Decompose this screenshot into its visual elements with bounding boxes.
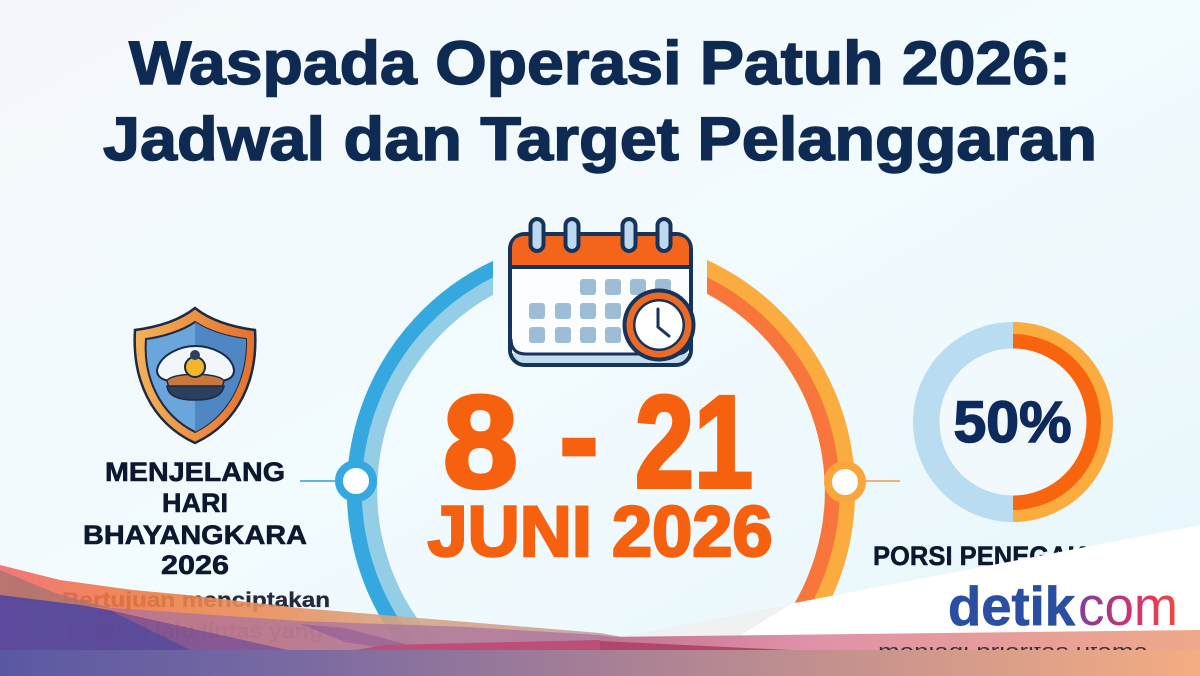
white corner wedge [623,525,1200,640]
title [103,29,1097,173]
donut chart 50% [913,322,1113,522]
detikcom logo: com [1078,575,1178,637]
icon: police shield [135,308,255,443]
left description: Bertujuan menciptakan [62,588,330,612]
left description [62,588,330,643]
date range: 8 [443,368,518,515]
left label: Menjelang Hari Bhayangkara 2026 [83,457,307,580]
blue arc [347,260,493,625]
icon: calendar with clock [510,217,696,365]
left label: Menjelang Hari Bhayangkara 2026: 2026 [161,550,229,580]
date range: - [559,362,599,509]
title: Jadwal dan Target Pelanggaran [103,105,1097,173]
left description: kondisi lalu lintas yang [67,619,323,643]
detikcom logo: detik [948,575,1075,637]
left label: Menjelang Hari Bhayangkara 2026: MENJELANG [105,457,285,487]
footer gradient bar [0,650,1200,676]
right description sliver: menjadi prioritas utama [878,641,1149,663]
date range [428,362,772,572]
detikcom logo [948,575,1178,637]
left label: Menjelang Hari Bhayangkara 2026: HARI [162,488,228,518]
date range: 21 [635,368,753,515]
left label: Menjelang Hari Bhayangkara 2026: BHAYANGKARA [83,520,307,550]
date range: JUNI 2026 [428,493,772,572]
right connector node [828,465,900,499]
right label: PORSI PENEGAKAN [873,541,1123,571]
title: Waspada Operasi Patuh 2026: [129,29,1071,97]
footer band: right [600,630,1200,651]
orange arc [707,260,855,603]
donut chart 50%: 50% [954,390,1072,455]
footer wave: left [0,565,790,651]
left connector node [300,464,373,498]
